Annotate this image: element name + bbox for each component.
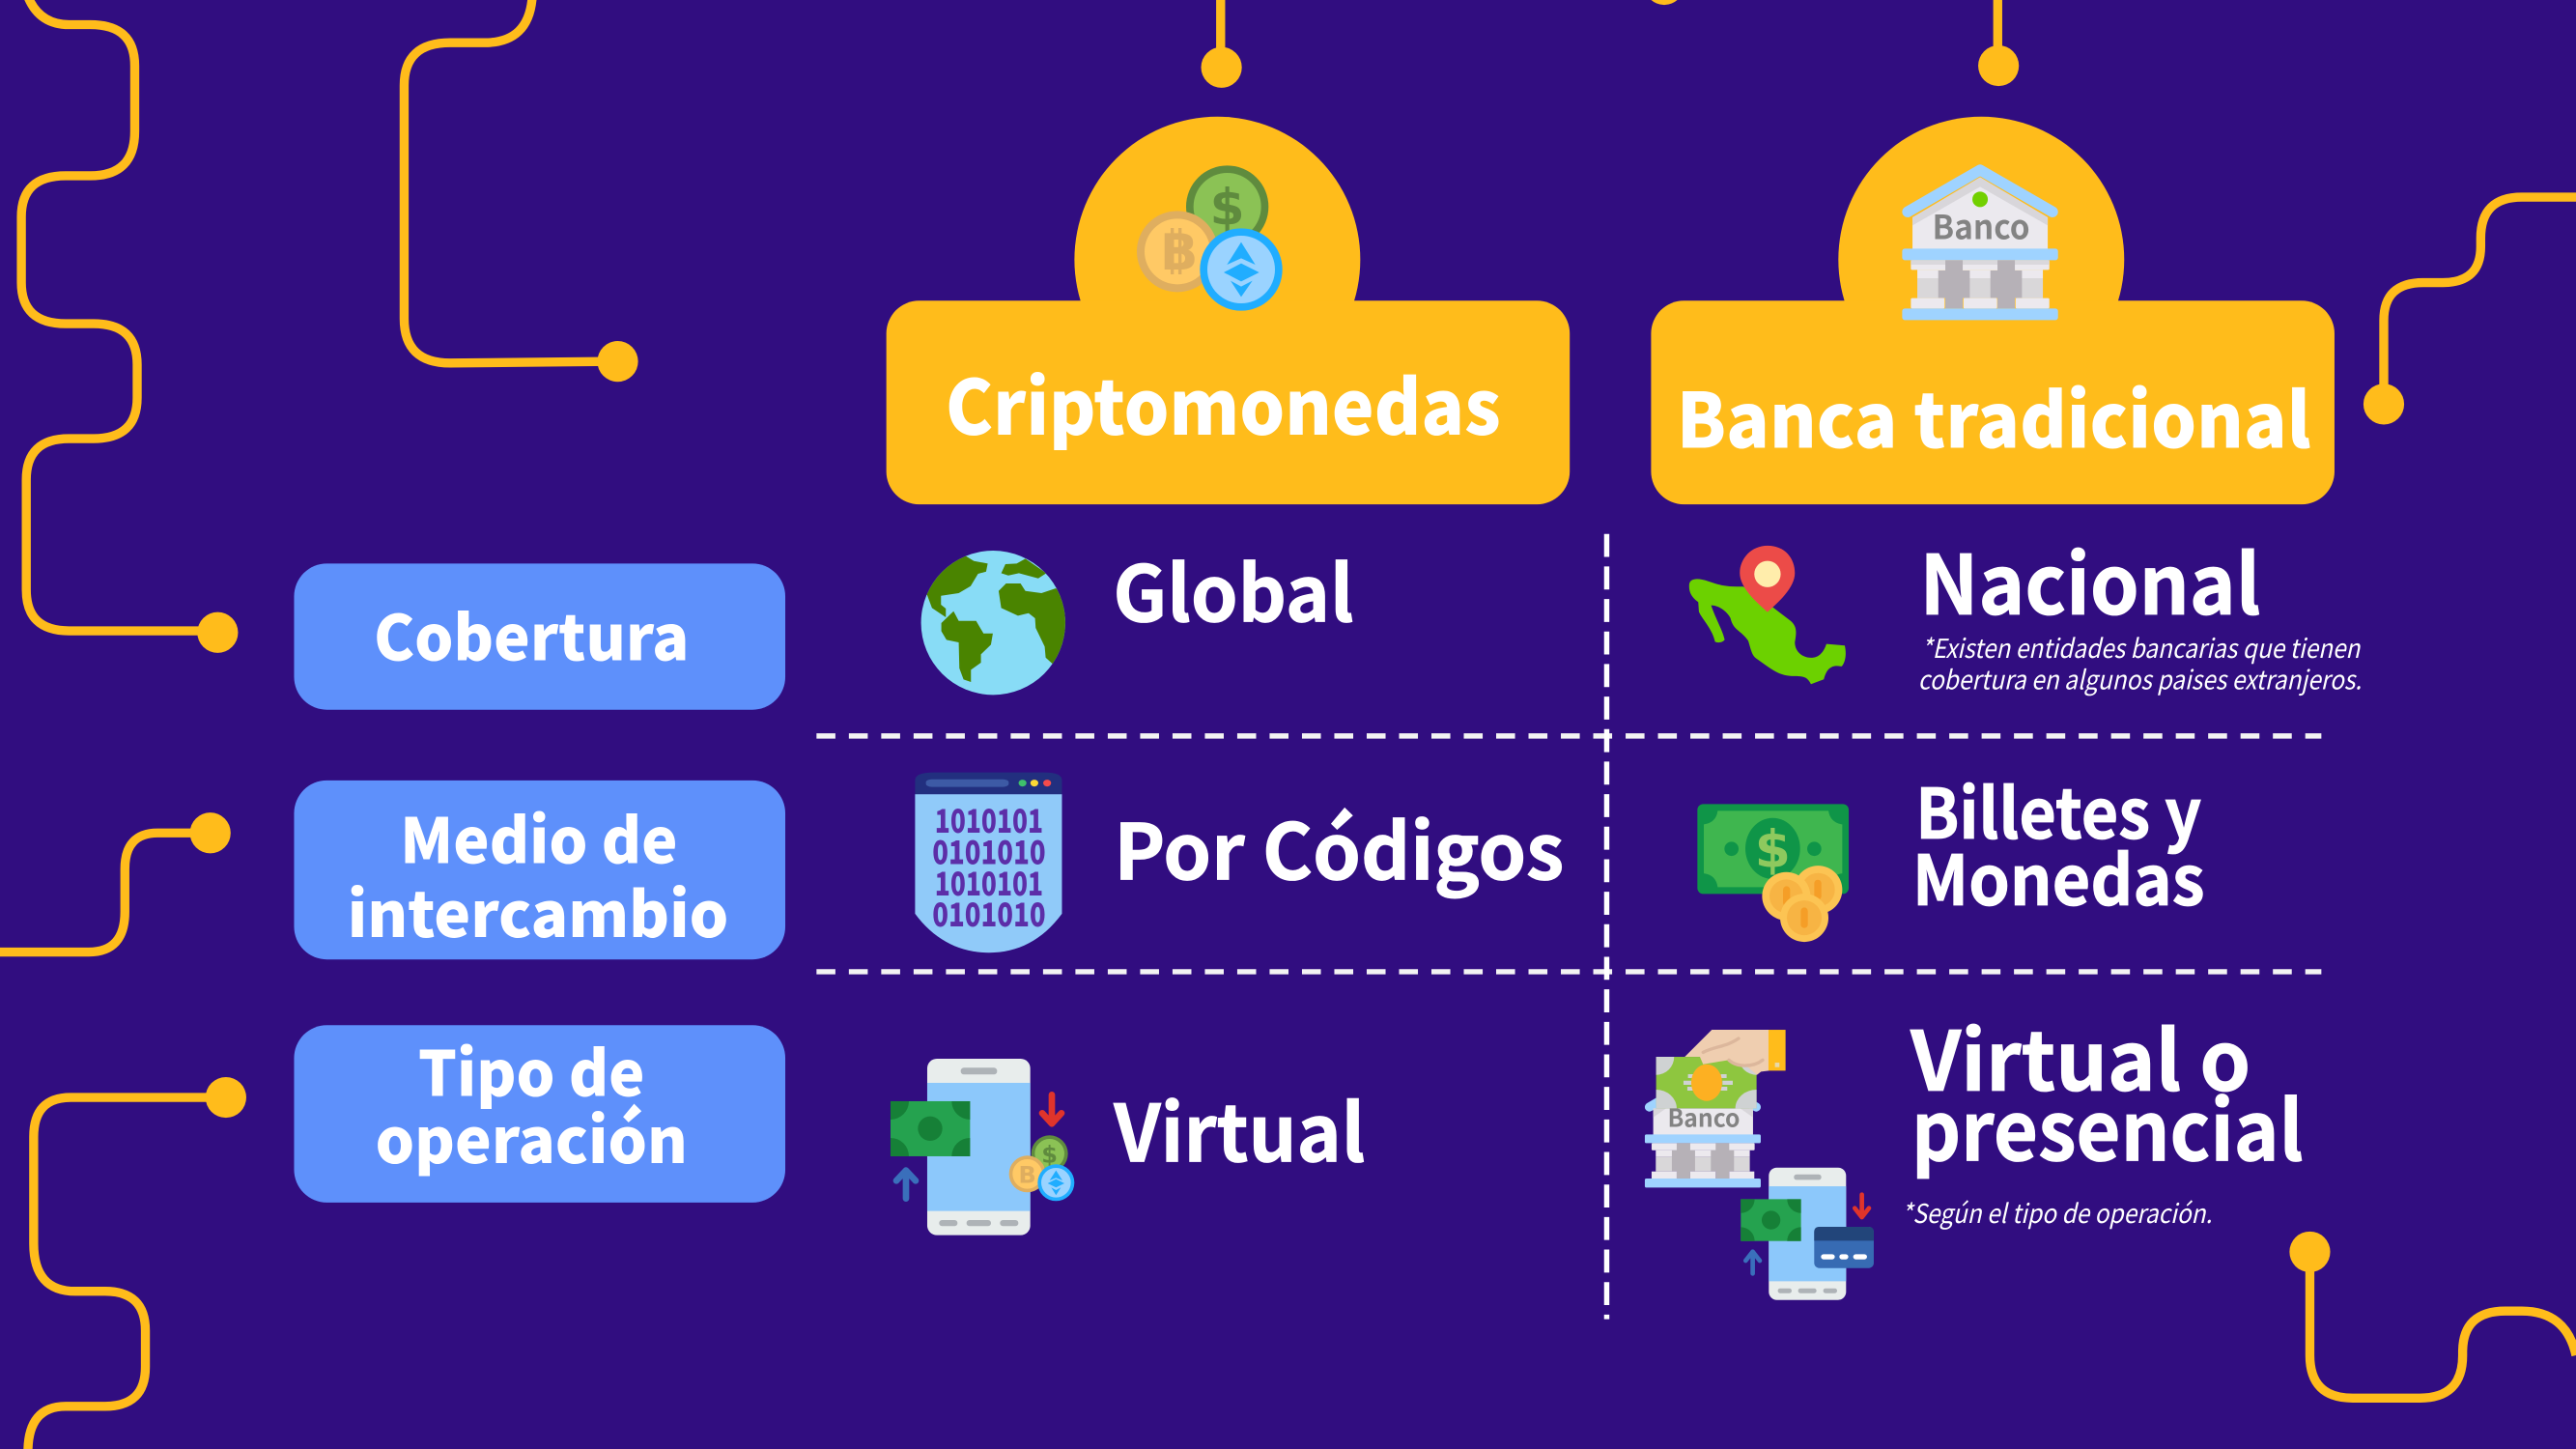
circuit line: right [2364,197,2576,424]
circuit line: bottom right [2289,1232,2576,1398]
icon: phone with money and crypto [891,1059,1074,1236]
circuit dot top center [1645,0,1684,5]
note: presencial footnote: *Según el tipo de operación. [1902,1192,2212,1231]
text: Virtual o presencial: presencial [1911,1066,2304,1185]
row label: Cobertura [294,563,785,710]
icon: bank with hand and phone [1645,1030,1874,1300]
row label: Medio de intercambio [294,781,785,959]
icon: crypto coins: $ [1210,179,1245,237]
icon: banknote and coins: $ [1755,818,1791,879]
circuit line: top left second [404,0,638,382]
icon: binary code shield: 0101010 [932,889,1046,936]
heading: Criptomonedas: Criptomonedas [946,347,1501,457]
text: Billetes y Monedas [1912,758,2205,925]
icon: bank building [1902,170,2058,320]
icon: binary code shield: 0101010 [932,827,1046,874]
circuit line: medio [0,812,231,952]
icon: binary code shield: 1010101 [935,795,1043,842]
icon: banknote and coins [1697,804,1849,942]
row label: Medio de intercambio: intercambio [348,865,728,955]
circuit stem above banca [1978,0,2019,86]
panel: banca tradicional header [1651,117,2335,504]
text: Por Codigos: Por Códigos [1114,791,1564,903]
panel: criptomonedas header [887,117,1570,504]
row label: Tipo de operacion: Tipo de [418,1023,645,1114]
text: Nacional: Nacional [1919,520,2260,639]
icon: phone with money and crypto: B [1019,1161,1036,1188]
circuit stem above cripto [1202,0,1242,88]
icon: binary code shield [915,773,1062,952]
icon: globe [918,551,1072,695]
text: Virtual o presencial [1910,996,2304,1185]
icon: bank building: Banco [1933,201,2030,249]
text: Virtual o presencial: Virtual o [1910,996,2250,1115]
note: Nacional footnote: cobertura en algunos paises extranjeros. [1918,658,2362,696]
icon: crypto coins [1137,165,1283,311]
row label: Medio de intercambio: Medio de [400,791,678,882]
circuit line: top left long [21,0,238,653]
text: Virtual: Virtual [1113,1069,1365,1184]
text: Billetes y Monedas: Billetes y [1915,758,2201,859]
note: Nacional footnote: *Existen entidades bancarias que tienen [1921,627,2362,666]
row label: Tipo de operacion [294,1023,785,1203]
text: Global: Global [1113,533,1354,645]
icon: phone with money and crypto: $ [1041,1141,1058,1168]
row label: Tipo de operacion: operación [376,1091,688,1181]
icon: bank with hand and phone: Banco [1667,1100,1740,1135]
heading: Banca tradicional: Banca tradicional [1677,359,2310,469]
icon: Mexico map with pin [1689,546,1846,684]
icon: crypto coins: B [1160,224,1198,282]
circuit line: tipo [28,1077,246,1449]
text: Billetes y Monedas: Monedas [1912,825,2205,925]
row label: Cobertura: Cobertura [374,588,690,679]
note: Nacional footnote [1918,627,2362,696]
icon: binary code shield: 1010101 [935,858,1043,905]
